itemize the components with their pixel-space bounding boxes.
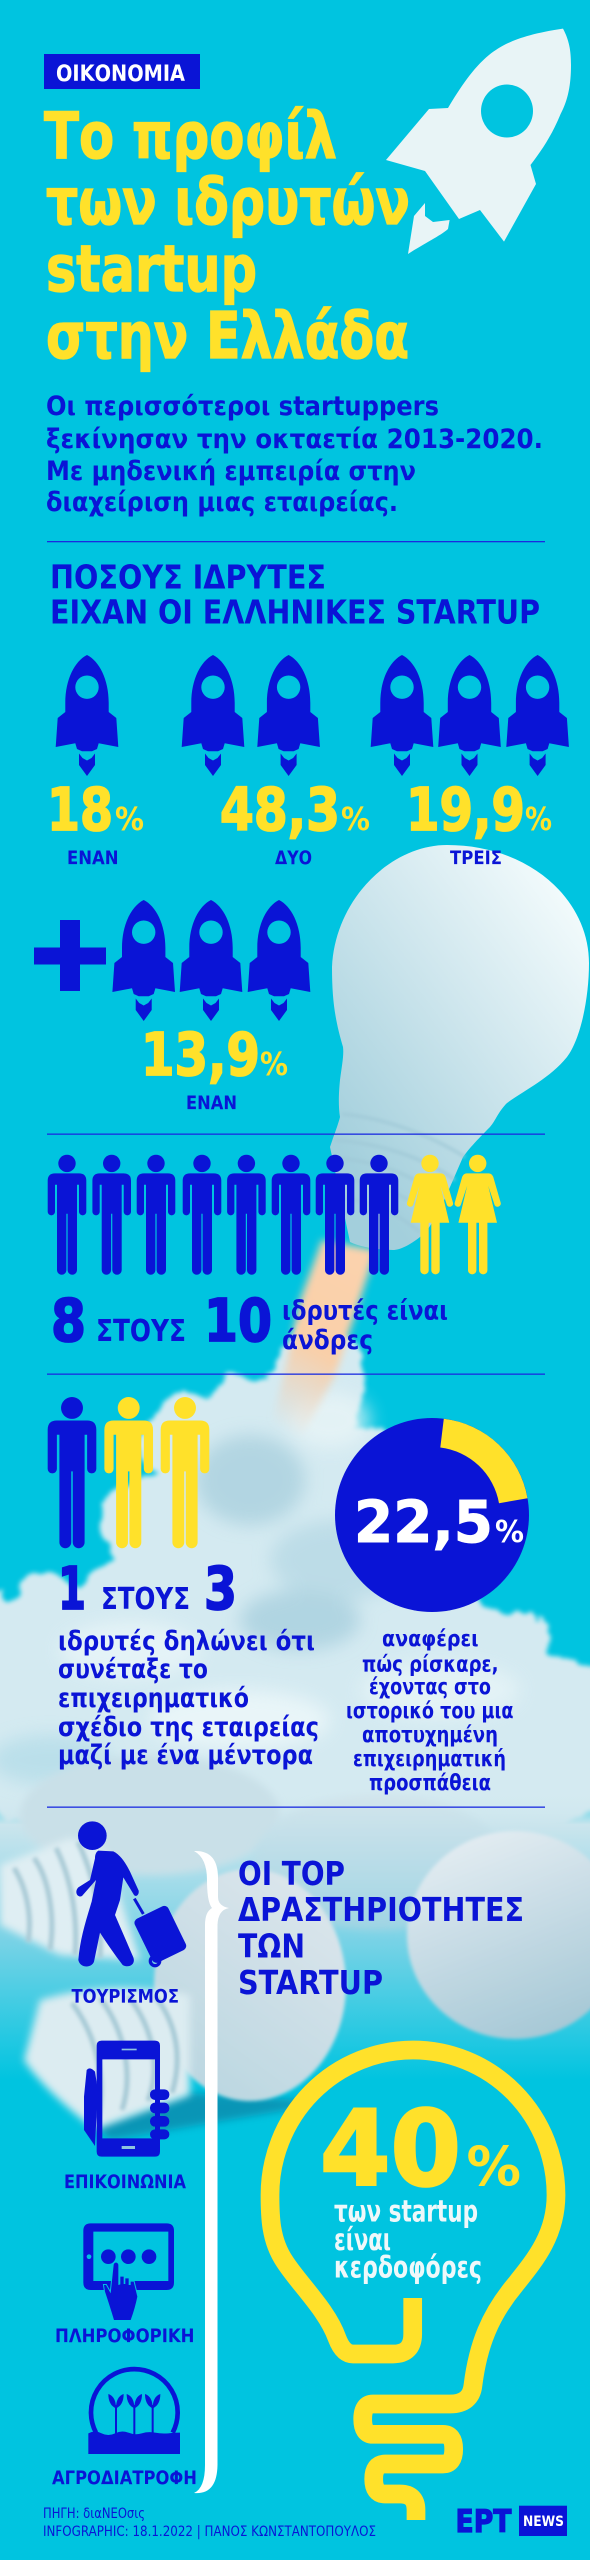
section heading: top activities: ΔΡΑΣΤΗΡΙΟΤΗΤΕΣ	[238, 1890, 524, 1929]
label: agrifood: ΑΓΡΟΔΙΑΤΡΟΦΗ	[52, 2467, 197, 2489]
photo: clouds	[0, 1330, 590, 1840]
title: των ιδρυτών	[46, 166, 410, 240]
intro text	[46, 391, 543, 518]
logo: ERT News: ΕΡΤ	[456, 2504, 512, 2540]
stat: 40% profitable: των startup	[334, 2194, 478, 2230]
stat: 8 in 10 founders are men: 10	[204, 1286, 272, 1355]
rocket stat: one founder: ΕΝΑΝ	[67, 847, 118, 869]
rocket stat: two founders: 48,3	[220, 775, 340, 844]
label: informatics: ΠΛΗΡΟΦΟΡΙΚΗ	[55, 2325, 194, 2347]
intro text: Οι περισσότεροι startuppers	[46, 391, 439, 422]
intro text: διαχείριση μιας εταιρείας.	[46, 487, 398, 518]
title: startup	[46, 233, 257, 307]
stat: 1 in 3 with mentor: 1	[58, 1554, 86, 1623]
icon: yellow light bulb outline	[270, 2050, 556, 2520]
rocket stat: three founders: 19,9	[406, 775, 525, 844]
stat: 1 in 3 with mentor	[58, 1554, 319, 1771]
rocket stat: three founders	[371, 655, 569, 869]
donut chart: 22,5%: 22,5	[354, 1488, 493, 1556]
stat: 8 in 10 founders are men: άνδρες	[282, 1325, 373, 1356]
stat: 1 in 3 with mentor: 3	[204, 1554, 237, 1623]
text: failed attempt: αναφέρει	[382, 1627, 479, 1652]
rocket stat: more than three founders: ΕΝΑΝ	[186, 1092, 237, 1114]
icon: traveler, tourism	[76, 1821, 188, 1966]
text: failed attempt: επιχειρηματική	[353, 1747, 506, 1772]
rocket stat: more than three founders: 13,9	[141, 1020, 260, 1089]
rocket stat: two founders: ΔΥΟ	[275, 847, 312, 869]
stat: 8 in 10 founders are men: ΣΤΟΥΣ	[96, 1314, 186, 1349]
white brace	[194, 1851, 229, 2493]
label: communication: ΕΠΙΚΟΙΝΩΝΙΑ	[64, 2171, 186, 2193]
stat: 1 in 3 with mentor: ΣΤΟΥΣ	[101, 1582, 190, 1617]
pictogram: 8 men and 2 women	[48, 1155, 501, 1275]
rocket stat: one founder	[47, 655, 144, 869]
logo: ERT News: NEWS	[523, 2514, 564, 2530]
photo: light bulbs backdrop	[0, 1755, 590, 2140]
stat: 8 in 10 founders are men: ιδρυτές είναι	[282, 1296, 448, 1326]
text: failed attempt: αποτυχημένη	[362, 1723, 498, 1748]
section heading: top activities	[238, 1854, 524, 2002]
section heading: founders count: ΠΟΣΟΥΣ ΙΔΡΥΤΕΣ	[50, 558, 326, 596]
rocket stat: two founders	[182, 655, 370, 869]
rocket stat: more than three founders: %	[260, 1045, 288, 1083]
intro text: ξεκίνησαν την οκταετία 2013-2020.	[46, 424, 543, 455]
stat: 40% profitable: 40	[320, 2088, 461, 2210]
label: tourism: ΤΟΥΡΙΣΜΟΣ	[72, 1986, 179, 2008]
pictogram: 1 in 3	[48, 1397, 209, 1548]
section heading: founders count	[50, 558, 540, 632]
rocket stat: two founders: %	[341, 800, 370, 838]
source credits: ΠΗΓΗ: διαΝΕΟσις	[43, 2506, 145, 2522]
title	[44, 100, 410, 374]
category tag: ΟΙΚΟΝΟΜΙΑ	[56, 61, 185, 87]
stat: 1 in 3 with mentor: σχέδιο της εταιρείας	[58, 1712, 319, 1743]
section heading: top activities: ΤΩΝ	[238, 1926, 305, 1966]
logo: ERT News	[456, 2504, 567, 2540]
rocket stat: three founders: ΤΡΕΙΣ	[450, 847, 502, 869]
stat: 1 in 3 with mentor: ιδρυτές δηλώνει ότι	[58, 1626, 315, 1657]
stat: 8 in 10 founders are men: 8	[51, 1286, 86, 1355]
text: failed attempt: προσπάθεια	[369, 1771, 491, 1796]
icon: seedlings, agrifood	[88, 2369, 180, 2454]
stat: 40% profitable: είναι	[334, 2223, 391, 2258]
title: Το προφίλ	[44, 100, 337, 174]
text: failed attempt: ιστορικό του μια	[346, 1699, 514, 1724]
source credits: INFOGRAPHIC: 18.1.2022 | ΠΑΝΟΣ ΚΩΝΣΤΑΝΤΟΠΟΥΛΟΣ	[43, 2524, 376, 2540]
icon: phone, communication	[84, 2041, 169, 2157]
stat: 1 in 3 with mentor: μαζί με ένα μέντορα	[58, 1740, 313, 1771]
photo: light bulb	[330, 845, 589, 1250]
section heading: top activities: ΟΙ ΤΟΡ	[238, 1854, 345, 1893]
text: failed attempt: έχοντας στο	[369, 1675, 491, 1700]
text: failed attempt: πώς ρίσκαρε,	[362, 1652, 498, 1678]
stat: 40% profitable: %	[466, 2135, 521, 2198]
photo: rocket flame	[270, 1240, 376, 1440]
intro text: Με μηδενική εμπειρία στην	[46, 456, 416, 487]
rocket stat: more than three founders	[34, 900, 310, 1114]
text: failed attempt	[346, 1627, 514, 1796]
donut chart: 22,5%	[335, 1418, 529, 1612]
stat: 1 in 3 with mentor: επιχειρηματικό	[58, 1683, 249, 1714]
icon: tablet, informatics	[83, 2223, 174, 2320]
stat: 1 in 3 with mentor: συνέταξε το	[58, 1654, 208, 1685]
rocket stat: one founder: 18	[47, 775, 113, 844]
title: στην Ελλάδα	[46, 300, 409, 374]
donut chart: 22,5%: %	[495, 1515, 524, 1550]
source credits	[43, 2506, 376, 2540]
stat: 40% profitable: κερδοφόρες	[334, 2250, 482, 2286]
rocket stat: one founder: %	[115, 800, 144, 838]
category tag	[44, 54, 200, 89]
icon: white rocket	[386, 29, 571, 254]
section heading: top activities: STARTUP	[238, 1963, 383, 2002]
rocket stat: three founders: %	[525, 800, 552, 838]
stat: 8 in 10 founders are men	[51, 1286, 448, 1356]
stat: 40% profitable	[320, 2088, 521, 2286]
